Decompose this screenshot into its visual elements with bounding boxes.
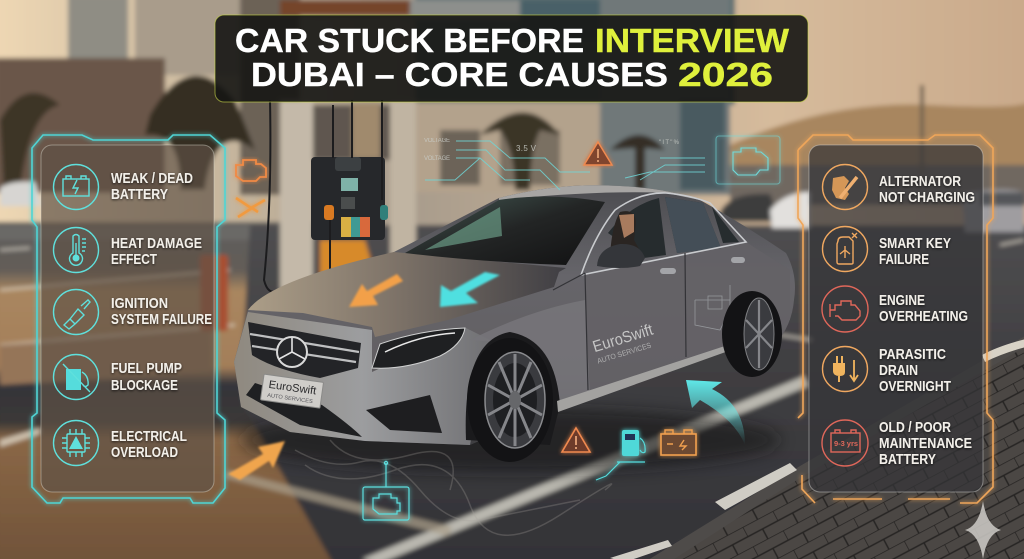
item: old battery: 9-3 yrs bbox=[834, 439, 858, 448]
door lettering: EuroSwift bbox=[591, 321, 656, 356]
paved sidewalk bbox=[610, 333, 1024, 559]
item: old battery bbox=[822, 419, 972, 468]
sill bbox=[557, 343, 734, 412]
door lines and handles bbox=[553, 253, 686, 390]
car body bbox=[234, 185, 795, 445]
right panel frame bbox=[798, 135, 993, 503]
number plate bbox=[260, 374, 324, 408]
item: old battery: BATTERY bbox=[879, 451, 936, 468]
title line 2: DUBAI – CORE CAUSES bbox=[251, 56, 668, 93]
parking lines bbox=[362, 376, 808, 559]
HUD: voltage circuits bbox=[424, 138, 705, 190]
icon: engine box with circuit bbox=[363, 461, 409, 520]
icon: engine hologram box bbox=[716, 136, 780, 184]
item: parasitic drain: OVERNIGHT bbox=[879, 378, 951, 395]
arrow: orange on hood bbox=[349, 274, 403, 307]
icon: orange wrench bbox=[236, 198, 265, 217]
item: electrical overload: OVERLOAD bbox=[111, 444, 178, 461]
item: parasitic drain: PARASITIC bbox=[879, 346, 946, 363]
front wheel bbox=[467, 338, 553, 462]
title line 1: CAR STUCK BEFORE bbox=[235, 22, 584, 59]
title line 2: 2026 bbox=[678, 56, 773, 93]
headlight bbox=[372, 328, 465, 368]
item: smart key: FAILURE bbox=[879, 251, 929, 268]
mercedes star bbox=[277, 337, 307, 367]
hood bbox=[248, 252, 566, 337]
item: ignition: SYSTEM FAILURE bbox=[111, 311, 212, 328]
left panel frame bbox=[32, 135, 225, 503]
item: fuel pump: FUEL PUMP bbox=[111, 360, 182, 377]
item: weak dead battery: WEAK / DEAD bbox=[111, 170, 193, 187]
icon: fuel pump floating low bbox=[596, 430, 645, 480]
number plate: EuroSwift bbox=[268, 379, 317, 397]
number plate: AUTO SERVICES bbox=[267, 393, 313, 405]
item: parasitic drain bbox=[822, 346, 951, 395]
item: weak dead battery: BATTERY bbox=[111, 186, 168, 203]
item: weak dead battery bbox=[54, 164, 193, 210]
sparkle watermark bbox=[965, 501, 1001, 559]
arrow: cyan curved bbox=[686, 380, 745, 445]
side windows bbox=[608, 197, 739, 258]
item: alternator: NOT CHARGING bbox=[879, 189, 975, 206]
door panels highlight bbox=[585, 242, 790, 395]
wing mirror bbox=[597, 244, 645, 268]
panel: left causes bbox=[32, 135, 225, 503]
item: heat damage: EFFECT bbox=[111, 251, 157, 268]
item: heat damage bbox=[54, 228, 202, 272]
item: fuel pump bbox=[54, 354, 182, 400]
bollard bbox=[200, 255, 228, 331]
front bumper bbox=[234, 312, 490, 445]
item: old battery: OLD / POOR bbox=[879, 419, 951, 436]
item: alternator: ALTERNATOR bbox=[879, 173, 961, 190]
car shadow bbox=[240, 408, 780, 472]
item: ignition bbox=[54, 290, 212, 334]
item: smart key bbox=[822, 226, 951, 272]
item: alternator bbox=[822, 164, 975, 210]
roof highlight bbox=[499, 185, 700, 200]
grille bbox=[248, 322, 361, 378]
right panel glass bbox=[809, 145, 983, 492]
item: parasitic drain: DRAIN bbox=[879, 362, 918, 379]
icon: warning triangle floating low bbox=[562, 428, 590, 452]
label: voltage readings: 3.5 V bbox=[516, 144, 537, 153]
asphalt bbox=[240, 225, 1024, 559]
left panel glass bbox=[41, 145, 214, 492]
rear wheel bbox=[722, 291, 782, 377]
driver bbox=[610, 211, 644, 258]
title line 1: INTERVIEW bbox=[595, 22, 790, 59]
windshield bbox=[405, 196, 605, 265]
item: engine overheating: OVERHEATING bbox=[879, 308, 968, 325]
arrow: cyan on hood bbox=[440, 272, 500, 307]
item: smart key: SMART KEY bbox=[879, 235, 951, 252]
item: ignition: IGNITION bbox=[111, 295, 168, 312]
item: engine overheating bbox=[822, 286, 968, 332]
exhaust swirl under the car bbox=[295, 440, 612, 535]
item: heat damage: HEAT DAMAGE bbox=[111, 235, 202, 252]
lower intake bbox=[246, 383, 362, 437]
item: engine overheating: ENGINE bbox=[879, 292, 925, 309]
arrow: orange bottom left bbox=[228, 441, 285, 480]
door lettering: AUTO SERVICES bbox=[596, 341, 652, 366]
item: old battery: MAINTENANCE bbox=[879, 435, 972, 452]
item: fuel pump: BLOCKAGE bbox=[111, 377, 178, 394]
parked cars bbox=[0, 182, 42, 206]
label: voltage readings: "IT"% bbox=[659, 140, 680, 146]
wheel arch bbox=[466, 332, 560, 445]
icon: orange engine bbox=[236, 160, 266, 181]
left ground bbox=[0, 222, 335, 559]
fuel station bbox=[280, 100, 313, 290]
fuel pump dispenser bbox=[264, 100, 388, 292]
title banner bbox=[215, 15, 808, 102]
car bbox=[234, 185, 795, 472]
label: voltage readings: VOLTAGE bbox=[424, 156, 450, 162]
item: electrical overload bbox=[54, 420, 187, 466]
panel: right causes bbox=[798, 135, 993, 503]
icon: warning triangle floating high bbox=[584, 142, 612, 165]
label: voltage readings bbox=[424, 138, 680, 162]
icon: battery floating low bbox=[661, 430, 696, 455]
item: electrical overload: ELECTRICAL bbox=[111, 428, 187, 445]
door circuit decal bbox=[695, 285, 730, 330]
label: voltage readings: VOLTAGE bbox=[424, 138, 450, 144]
